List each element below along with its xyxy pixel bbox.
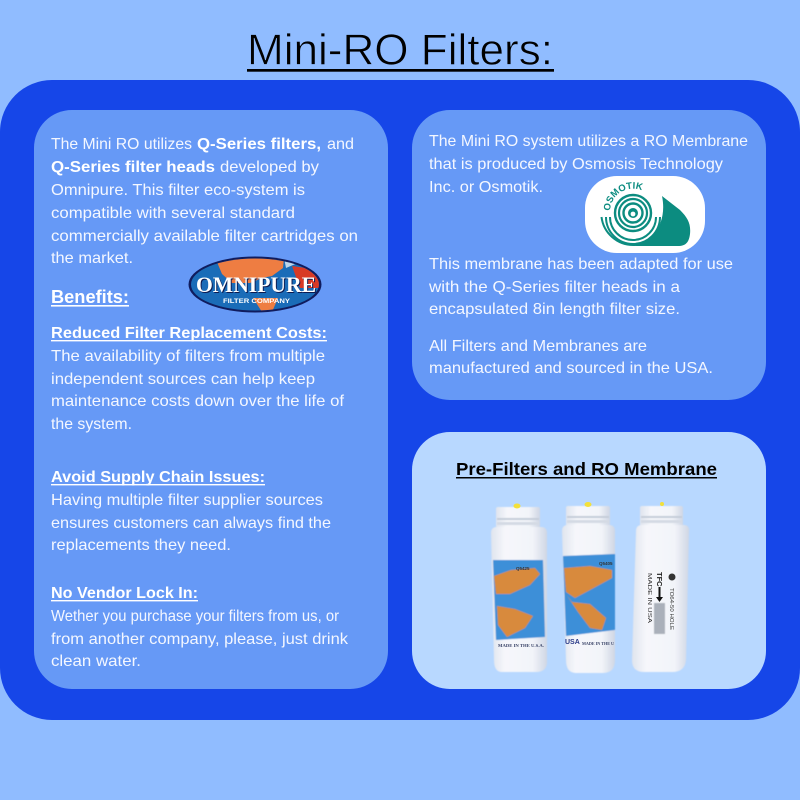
- main dark blue panel: [0, 80, 800, 720]
- membrane intro text: Inc. or Osmotik.: [429, 179, 543, 196]
- filter cartridge 3: TO64-50 HOLE: [668, 588, 674, 630]
- panel: Omnipure filters and benefits: [34, 110, 388, 689]
- benefit: reduced filter replacement costs: independent sources can help keep: [51, 371, 315, 388]
- benefit: avoid supply chain issues: replacements they need.: [51, 537, 231, 554]
- heading: Pre-Filters and RO Membrane: Pre-Filters and RO Membrane: [456, 459, 717, 479]
- intro text block: the market.: [51, 250, 133, 267]
- filter cartridge 3: [632, 502, 689, 672]
- icon: Omnipure logo: OMNIPURE: [197, 273, 317, 298]
- membrane adaptation text: This membrane has been adapted for use: [429, 256, 733, 273]
- icon: Omnipure logo: FILTER COMPANY: [223, 298, 291, 305]
- benefit: no vendor lock in: [51, 585, 349, 670]
- icon: Osmotik logo: [585, 176, 705, 253]
- intro text block: The Mini RO utilizes: [51, 136, 192, 153]
- sourcing text: All Filters and Membranes are: [429, 338, 647, 355]
- membrane intro text: The Mini RO system utilizes a RO Membrane: [429, 133, 748, 150]
- intro text block: developed by: [220, 159, 319, 176]
- intro text block: and: [327, 136, 354, 153]
- benefit: reduced filter replacement costs: Reduced Filter Replacement Costs:: [51, 325, 327, 342]
- benefit: avoid supply chain issues: Avoid Supply Chain Issues:: [51, 469, 265, 486]
- icon: Osmotik logo: OSMOTIK: [604, 182, 644, 210]
- photo: three filter cartridges: [491, 502, 689, 673]
- icon: Omnipure logo: OMNIPURE: [196, 272, 316, 297]
- filter cartridge 1: MADE IN THE U.S.A.: [498, 643, 544, 648]
- intro text block: Q-Series filter heads: [51, 159, 215, 176]
- filter cartridge 2: MADE IN THE U: [582, 641, 614, 646]
- membrane adaptation text: encapsulated 8in length filter size.: [429, 301, 680, 318]
- filter cartridge 3: TFC: [655, 572, 664, 587]
- benefit: avoid supply chain issues: [51, 469, 331, 554]
- membrane intro text: that is produced by Osmosis Technology: [429, 156, 723, 173]
- panel: RO membrane: [412, 110, 766, 400]
- filter cartridge 1: Q5425: [516, 566, 530, 571]
- benefit: reduced filter replacement costs: maintenance costs down over the life of: [51, 393, 345, 410]
- benefit: no vendor lock in: No Vendor Lock In:: [51, 585, 198, 602]
- sourcing text: manufactured and sourced in the USA.: [429, 360, 713, 377]
- filter cartridge 2: Q5405: [599, 561, 613, 566]
- intro text block: compatible with several standard: [51, 205, 295, 222]
- intro text block: [51, 136, 358, 267]
- benefit: avoid supply chain issues: ensures customers can always find the: [51, 515, 331, 532]
- intro text block: Omnipure. This filter eco-system is: [51, 182, 305, 199]
- heading: Benefits: Benefits:: [51, 287, 129, 307]
- panel: pre-filters photo: [412, 432, 766, 689]
- filter cartridge 1: [491, 504, 547, 672]
- benefit: avoid supply chain issues: Having multiple filter supplier sources: [51, 492, 323, 509]
- membrane adaptation text: with the Q-Series filter heads in a: [428, 279, 680, 296]
- benefit: reduced filter replacement costs: [51, 325, 345, 433]
- benefit: no vendor lock in: clean water.: [51, 653, 141, 670]
- benefit: reduced filter replacement costs: the system.: [51, 416, 132, 433]
- membrane adaptation text: [428, 256, 733, 318]
- intro text block: commercially available filter cartridges on: [51, 228, 358, 245]
- filter cartridge 2: USA: [565, 639, 580, 646]
- benefit: reduced filter replacement costs: The availability of filters from multiple: [51, 348, 325, 365]
- membrane intro text: [429, 133, 748, 196]
- title: Mini-RO Filters:: [247, 26, 553, 74]
- benefit: no vendor lock in: from another company, please, just drink: [51, 631, 349, 648]
- filter cartridge 2: [562, 502, 615, 673]
- icon: Omnipure logo: [188, 256, 322, 312]
- filter cartridge 3: MADE IN USA: [646, 573, 652, 623]
- sourcing text: [429, 338, 713, 377]
- benefit: no vendor lock in: Wether you purchase your filters from us, or: [51, 608, 340, 625]
- intro text block: Q-Series filters,: [197, 136, 321, 153]
